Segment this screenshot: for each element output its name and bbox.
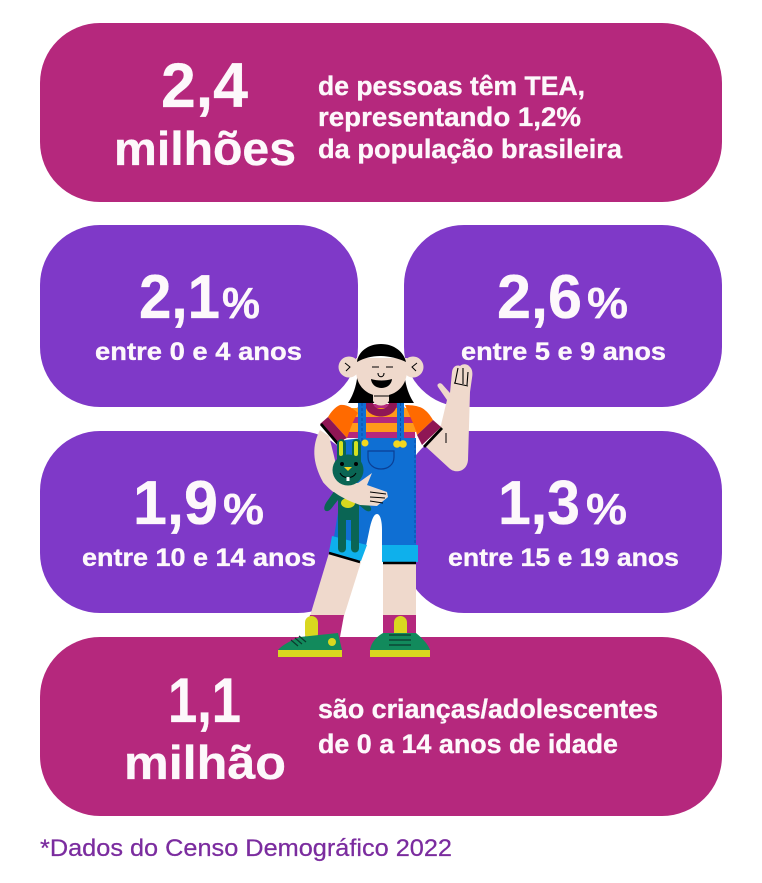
forearm and hand over bunny <box>323 465 388 506</box>
shirt <box>320 403 443 448</box>
shoes <box>278 616 430 657</box>
panel: 15 a 19 anos: 1,3 <box>498 469 580 538</box>
cuffs <box>329 536 367 561</box>
panel: 10 a 14 anos: % <box>223 485 264 534</box>
source note: *Dados do Censo Demográfico 2022 <box>40 835 452 862</box>
panel: 1,1 milhão: de 0 a 14 anos de idade <box>318 729 618 759</box>
overalls <box>334 438 416 546</box>
panel: 5 a 9 anos: entre 5 e 9 anos <box>461 338 666 366</box>
big unit: milhões: milhões <box>114 122 296 175</box>
legs <box>310 553 361 616</box>
panel: 0 a 4 anos: 2,1 <box>139 263 220 332</box>
panel: 1,1 milhão: milhão <box>124 736 286 789</box>
panel: 10 a 14 anos <box>40 431 358 613</box>
description text: da população brasileira <box>318 134 623 164</box>
panel: 5 a 9 anos: 2,6 <box>497 263 582 332</box>
panel: 2,4 milhões <box>40 23 722 202</box>
description text: representando 1,2% <box>318 102 581 132</box>
bunny head <box>332 439 364 486</box>
panel: 1,1 milhão: 1,1 <box>168 666 241 736</box>
big number: 2,4: 2,4 <box>161 51 248 121</box>
left upper arm <box>314 430 345 500</box>
panel: 10 a 14 anos: entre 10 e 14 anos <box>82 544 316 572</box>
panel: 15 a 19 anos: entre 15 e 19 anos <box>448 544 679 572</box>
neck <box>373 390 389 406</box>
head <box>338 344 424 396</box>
description text <box>318 71 623 164</box>
socks <box>305 615 344 637</box>
illustration: girl holding a green bunny, waving <box>278 344 472 657</box>
description text: de pessoas têm TEA, <box>318 71 585 101</box>
panel: 5 a 9 anos: % <box>587 279 628 328</box>
right arm and hand <box>424 364 472 471</box>
straps and buttons <box>358 403 415 545</box>
panel: 0 a 4 anos: % <box>222 279 260 328</box>
panel: 1,1 milhão: são crianças/adolescentes <box>318 694 658 724</box>
panel: 5 a 9 anos <box>404 225 722 407</box>
panel: 0 a 4 anos: entre 0 e 4 anos <box>95 338 302 366</box>
panel: 0 a 4 anos <box>40 225 358 407</box>
panel: 15 a 19 anos: % <box>586 485 627 534</box>
panel: 15 a 19 anos <box>404 431 722 613</box>
panel: 1,1 milhão <box>40 637 722 816</box>
panel: 10 a 14 anos: 1,9 <box>133 469 218 538</box>
bunny body and legs <box>324 490 371 552</box>
hair back <box>348 365 414 403</box>
